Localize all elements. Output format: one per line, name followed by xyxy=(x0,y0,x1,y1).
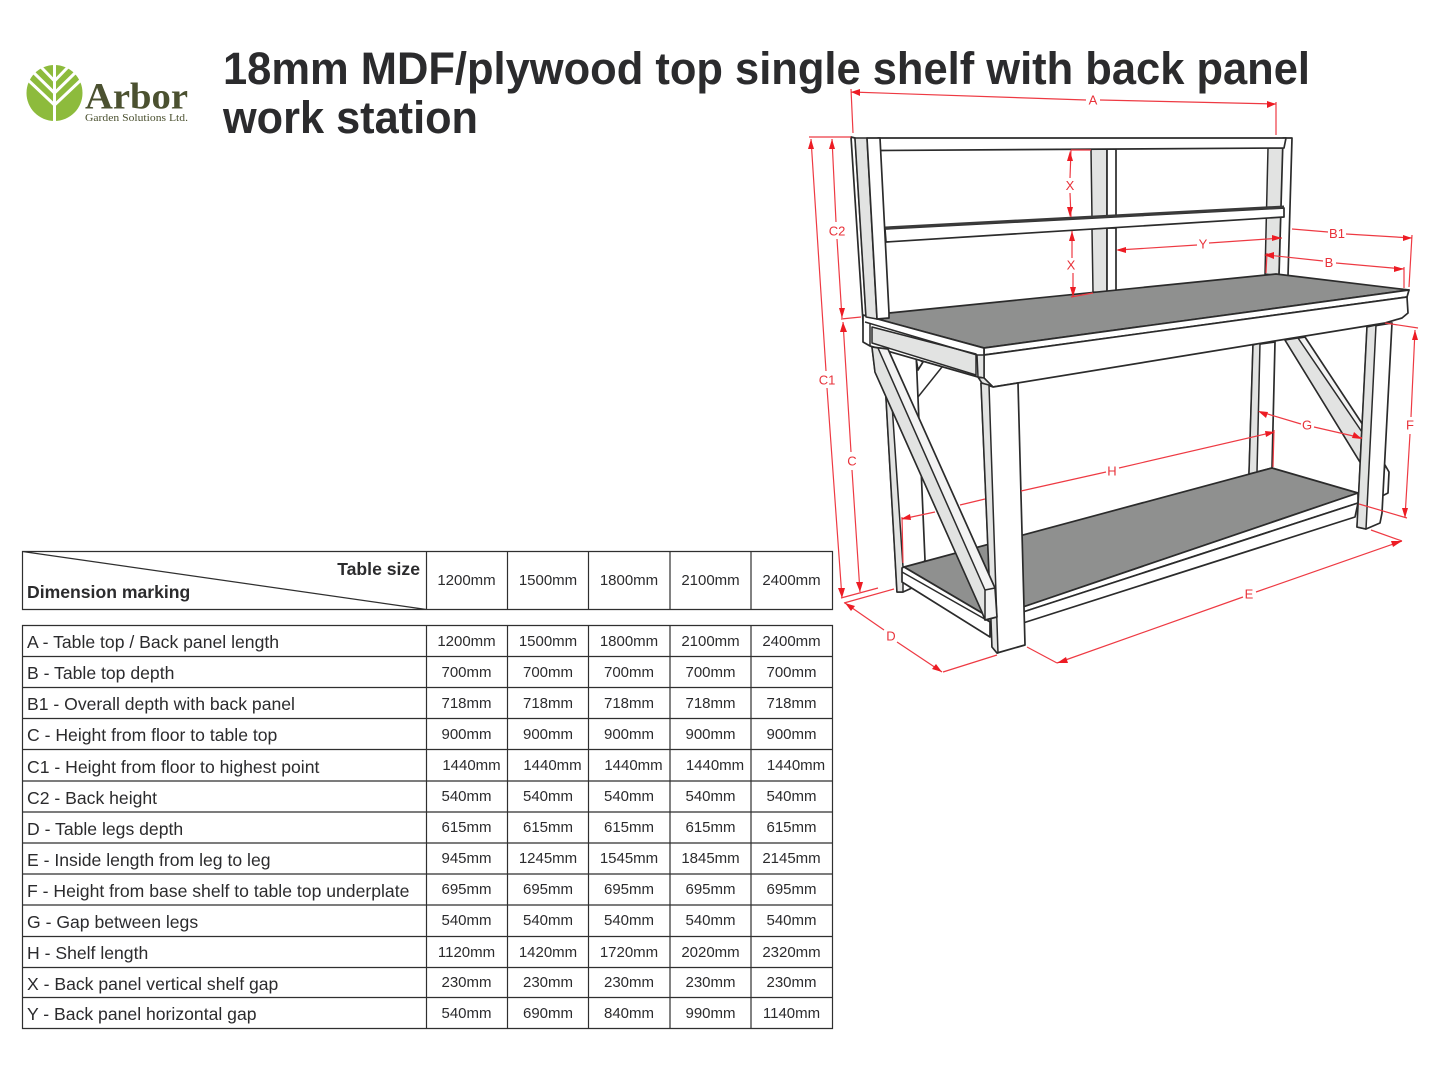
table side apron xyxy=(863,315,993,387)
row D: 615mm xyxy=(441,819,492,836)
logo tagline: Garden Solutions Ltd. xyxy=(85,113,188,124)
icon: green leaf xyxy=(26,63,82,123)
dimension D xyxy=(844,589,997,672)
dimension C xyxy=(840,317,878,598)
row E: 2145mm xyxy=(762,850,821,867)
header sizes xyxy=(437,572,821,589)
row C2: 540mm xyxy=(685,788,736,805)
centre post upper xyxy=(1091,149,1107,219)
left brace xyxy=(872,347,997,620)
table header xyxy=(22,552,832,610)
row Y: 1140mm xyxy=(763,1005,820,1022)
row C2: C2 - Back height xyxy=(27,788,157,808)
row B: 700mm xyxy=(685,664,736,681)
row B1 xyxy=(27,694,817,714)
row D: 615mm xyxy=(523,819,573,836)
row C: C - Height from floor to table top xyxy=(27,725,278,745)
row Y: 690mm xyxy=(523,1005,573,1022)
row G: G - Gap between legs xyxy=(27,912,198,932)
row F: 695mm xyxy=(441,881,492,898)
row D: 615mm xyxy=(604,819,654,836)
row X: 230mm xyxy=(441,974,492,991)
row H: H - Shelf length xyxy=(27,943,148,963)
row E: 1845mm xyxy=(681,850,740,867)
dimension H xyxy=(901,430,1275,563)
row C1: 1440mm xyxy=(523,757,582,774)
row Y: 990mm xyxy=(685,1005,736,1022)
row F: 695mm xyxy=(685,881,736,898)
row X: 230mm xyxy=(685,974,736,991)
rear left leg xyxy=(883,345,942,592)
row C2: 540mm xyxy=(604,788,654,805)
row C: 900mm xyxy=(766,726,817,743)
dimension Y xyxy=(1116,235,1282,253)
row C: 900mm xyxy=(523,726,573,743)
dimensions table xyxy=(22,626,832,1028)
dimension X lower xyxy=(1067,231,1093,297)
row B: 700mm xyxy=(441,664,492,681)
base shelf front rail xyxy=(1023,493,1358,612)
row B: B - Table top depth xyxy=(27,663,174,683)
row G: 540mm xyxy=(604,912,654,929)
dimension F: F xyxy=(1406,418,1414,432)
dimension E xyxy=(1027,530,1402,663)
table header grid xyxy=(22,552,832,610)
header label: dimension marking: Dimension marking xyxy=(27,582,190,602)
dimension F xyxy=(1359,323,1418,518)
header sizes: 2100mm xyxy=(681,572,740,589)
row G xyxy=(27,912,817,932)
header sizes: 2400mm xyxy=(762,572,821,589)
row D xyxy=(27,819,817,839)
gusset xyxy=(916,358,923,370)
row F: 695mm xyxy=(523,881,573,898)
row X xyxy=(27,974,817,994)
row X: 230mm xyxy=(604,974,654,991)
row E: E - Inside length from leg to leg xyxy=(27,850,271,870)
dimension H: H xyxy=(1107,464,1117,478)
table front apron xyxy=(982,290,1409,387)
row G: 540mm xyxy=(523,912,573,929)
row B1: 718mm xyxy=(604,695,654,712)
row H: 1720mm xyxy=(600,944,658,961)
row A: 2100mm xyxy=(681,633,740,650)
header sizes: 1800mm xyxy=(600,572,658,589)
row C: 900mm xyxy=(441,726,492,743)
row C2: 540mm xyxy=(523,788,573,805)
top rail xyxy=(878,138,1286,150)
row Y xyxy=(27,1004,820,1024)
base shelf top xyxy=(904,468,1358,618)
row A xyxy=(27,632,821,652)
right brace xyxy=(1285,337,1363,462)
left post xyxy=(855,138,889,319)
base shelf xyxy=(902,468,1358,637)
table top xyxy=(877,274,1409,348)
row X: X - Back panel vertical shelf gap xyxy=(27,974,279,994)
row Y: 540mm xyxy=(441,1005,492,1022)
dimension C: C xyxy=(847,454,857,468)
row C1: 1440mm xyxy=(767,757,825,774)
dimension X upper xyxy=(1066,150,1091,217)
row A: 1800mm xyxy=(600,633,658,650)
row C2 xyxy=(27,788,817,808)
dimension C1: C1 xyxy=(819,372,835,388)
dimension G: G xyxy=(1302,418,1312,432)
left post outer sliver xyxy=(851,137,866,337)
title: work station xyxy=(222,92,478,143)
row E xyxy=(27,850,821,870)
row G: 540mm xyxy=(766,912,817,929)
row B1: 718mm xyxy=(685,695,736,712)
row C1: 1440mm xyxy=(686,757,744,774)
row A: 1200mm xyxy=(437,633,496,650)
row B1: 718mm xyxy=(766,695,817,712)
workbench drawing xyxy=(851,137,1409,653)
row E: 1545mm xyxy=(600,850,658,867)
row E: 1245mm xyxy=(519,850,577,867)
row F xyxy=(27,881,817,901)
table grid xyxy=(22,626,832,1028)
row D: 615mm xyxy=(685,819,736,836)
row B1: 718mm xyxy=(523,695,573,712)
row X: 230mm xyxy=(766,974,817,991)
row C1: 1440mm xyxy=(442,757,501,774)
row C1: 1440mm xyxy=(604,757,663,774)
row Y: 840mm xyxy=(604,1005,654,1022)
header sizes: 1500mm xyxy=(519,572,577,589)
dimension D: D xyxy=(886,628,896,644)
row G: 540mm xyxy=(441,912,492,929)
rear right small foot xyxy=(1380,465,1389,497)
row B xyxy=(27,663,817,683)
row C1 xyxy=(27,757,825,777)
title: 18mm MDF/plywood top single shelf with back panel xyxy=(223,43,1310,94)
dimension B1: B1 xyxy=(1329,226,1345,241)
row B: 700mm xyxy=(604,664,654,681)
dimension C2: C2 xyxy=(829,224,845,238)
dimension E: E xyxy=(1245,586,1254,602)
row E: 945mm xyxy=(441,850,492,867)
dimension B1 xyxy=(1292,226,1412,287)
row A: 1500mm xyxy=(519,633,577,650)
title xyxy=(222,43,1310,143)
row C: 900mm xyxy=(685,726,736,743)
row F: 695mm xyxy=(766,881,817,898)
row Y: Y - Back panel horizontal gap xyxy=(27,1004,257,1024)
row C1: C1 - Height from floor to highest point xyxy=(27,757,320,777)
centre post lower xyxy=(1092,228,1107,293)
dimension B xyxy=(1264,252,1404,288)
row B1: B1 - Overall depth with back panel xyxy=(27,694,295,714)
dimension Y: Y xyxy=(1199,236,1208,252)
header sizes: 1200mm xyxy=(437,572,496,589)
row X: 230mm xyxy=(523,974,573,991)
dimension X upper: X xyxy=(1066,178,1075,193)
right front leg xyxy=(1357,323,1392,529)
row D: D - Table legs depth xyxy=(27,819,183,839)
row B: 700mm xyxy=(523,664,573,681)
dimension C1 xyxy=(808,137,851,598)
row F: 695mm xyxy=(604,881,654,898)
dimension X lower: X xyxy=(1067,258,1076,272)
row H: 2020mm xyxy=(681,944,740,961)
dimension A: A xyxy=(1089,92,1098,108)
row B: 700mm xyxy=(766,664,817,681)
row D: 615mm xyxy=(766,819,817,836)
row H: 1420mm xyxy=(519,944,577,961)
row G: 540mm xyxy=(685,912,736,929)
row C xyxy=(27,725,817,745)
dimension A xyxy=(851,89,1276,135)
row C: 900mm xyxy=(604,726,654,743)
base shelf end rail xyxy=(902,567,990,637)
row A: 2400mm xyxy=(762,633,821,650)
row H: 2320mm xyxy=(762,944,821,961)
row H: 1120mm xyxy=(438,944,495,961)
row B1: 718mm xyxy=(441,695,492,712)
dimension G xyxy=(1258,411,1362,439)
rear right leg xyxy=(1249,342,1275,474)
row C2: 540mm xyxy=(766,788,817,805)
right post xyxy=(1265,148,1283,276)
row H xyxy=(27,943,821,963)
back panel rails and posts xyxy=(851,137,1292,337)
dimension C2 xyxy=(829,139,845,318)
dimension annotations xyxy=(808,89,1418,672)
dimension B: B xyxy=(1325,255,1333,270)
header label: table size: Table size xyxy=(337,559,420,579)
left front leg xyxy=(981,383,1025,653)
middle rail xyxy=(885,208,1284,242)
logo: Arbor Garden Solutions xyxy=(26,63,188,124)
row A: A - Table top / Back panel length xyxy=(27,632,279,652)
row C2: 540mm xyxy=(441,788,492,805)
row F: F - Height from base shelf to table top underplate xyxy=(27,881,409,901)
logo wordmark: Arbor xyxy=(85,76,188,118)
